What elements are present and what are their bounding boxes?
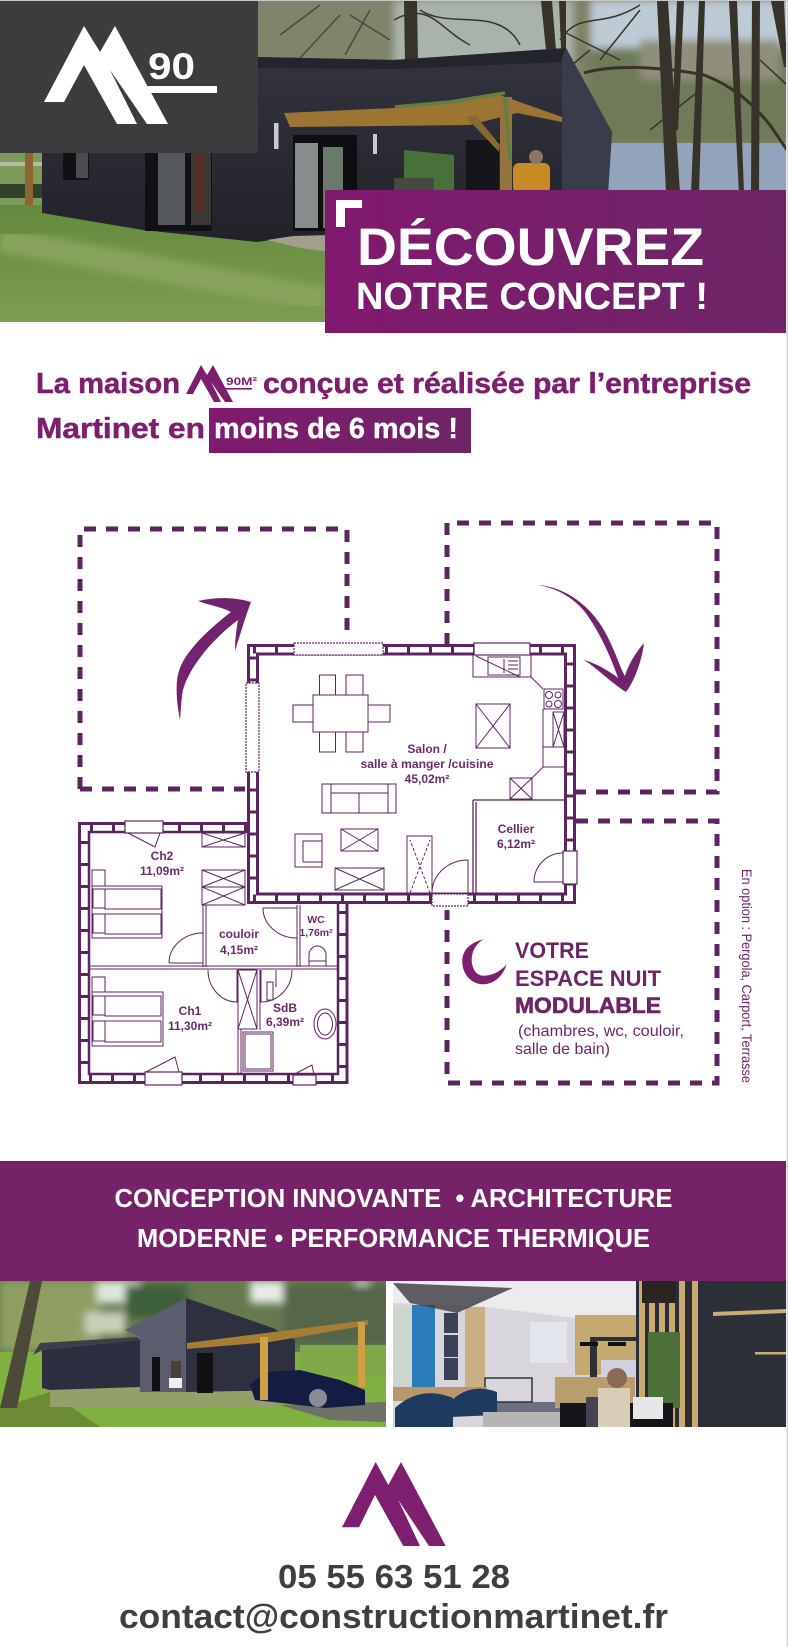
intro text block: [36, 365, 751, 453]
photo: house with carport: [0, 1281, 390, 1427]
benefits line 2: MODERNE • PERFORMANCE THERMIQUE: [137, 1223, 650, 1253]
walls: night block: [80, 824, 347, 1082]
furniture: dining table and chairs: [293, 675, 390, 752]
room label: Ch2: Ch2: [151, 849, 174, 863]
subheading: NOTRE CONCEPT !: [356, 276, 708, 318]
arrow: right zone to plan: [538, 585, 644, 692]
dashed zone: top left: [80, 529, 347, 789]
logo mark: [44, 26, 168, 124]
intro text block: moins de 6 mois !: [214, 413, 458, 445]
corner bracket: [336, 200, 362, 227]
bedroom Ch2 furniture: [92, 833, 245, 938]
room label: Ch1 area: 11,30m²: [168, 1019, 212, 1033]
bedroom Ch1 furniture: [92, 977, 163, 1046]
room label: WC area: 1,76m²: [299, 927, 333, 939]
kitchen: [473, 655, 564, 778]
heading: DÉCOUVREZ: [357, 217, 704, 277]
room label: salle à manger: salle à manger /cuisine: [360, 757, 494, 771]
room label: salon area: 45,02m²: [405, 772, 449, 786]
dashed zone: bottom right: [447, 821, 717, 1083]
callout: espace nuit: MODULABLE: [515, 993, 661, 1018]
room label: couloir area: 4,15m²: [220, 943, 258, 957]
room label: cellier: Cellier: [498, 822, 535, 836]
room label: couloir: couloir: [219, 927, 259, 941]
icon: moon: [462, 939, 507, 984]
logo number: 90: [148, 46, 195, 87]
contact: phone: 05 55 63 51 28: [278, 1558, 510, 1595]
benefits line 1: CONCEPTION INNOVANTE • ARCHITECTURE: [114, 1183, 672, 1213]
house body: [42, 48, 612, 242]
entrance and cellier doors: [407, 800, 564, 893]
footer logo: [342, 1462, 446, 1546]
inline logo: 90M²: [226, 376, 257, 388]
room label: SdB area: 6,39m²: [266, 1015, 304, 1029]
callout: espace nuit: VOTRE: [515, 938, 589, 963]
panel: headline banner: [325, 190, 786, 333]
tall wing: [186, 1298, 295, 1392]
intro text block: La maison: [36, 368, 180, 400]
room label: Ch2 area: 11,09m²: [140, 864, 184, 878]
room label: Ch1: Ch1: [179, 1004, 202, 1018]
side note: options: En option : Pergola, Carport, Terrasse: [739, 869, 754, 1083]
panel: benefits band: [0, 1161, 786, 1281]
room label: cellier area: 6,12m²: [497, 837, 535, 851]
furniture: sofa and living room: [295, 704, 532, 890]
dashed zone: top right: [447, 523, 717, 792]
left background: [0, 153, 42, 205]
intro text block: conçue et réalisée par l’entreprise: [263, 368, 751, 400]
callout: espace nuit: (chambres, wc, couloir,: [518, 1023, 684, 1040]
contact: email: contact@constructionmartinet.fr: [119, 1598, 668, 1636]
intro text block: Martinet en: [36, 413, 205, 445]
callout: espace nuit: [515, 938, 684, 1058]
interior partitions and doors: [89, 905, 338, 1075]
room label: SdB: SdB: [273, 1001, 297, 1015]
highlight: [209, 408, 471, 453]
pergola: [284, 95, 562, 127]
floor plan: [80, 643, 577, 1085]
room label: WC: WC: [307, 914, 325, 926]
room label: salon: Salon /: [407, 742, 447, 756]
logo panel: M90: [0, 1, 258, 153]
walls: main living block: [248, 646, 574, 902]
callout: espace nuit: ESPACE NUIT: [515, 966, 662, 991]
inline logo: [186, 365, 257, 402]
arrow: left zone to plan: [177, 598, 251, 720]
hero photo: dark wooden house by a lake: [0, 0, 788, 322]
photo: interior living room: [393, 1281, 786, 1427]
callout: espace nuit: salle de bain): [515, 1041, 610, 1058]
windows: [125, 643, 577, 1085]
